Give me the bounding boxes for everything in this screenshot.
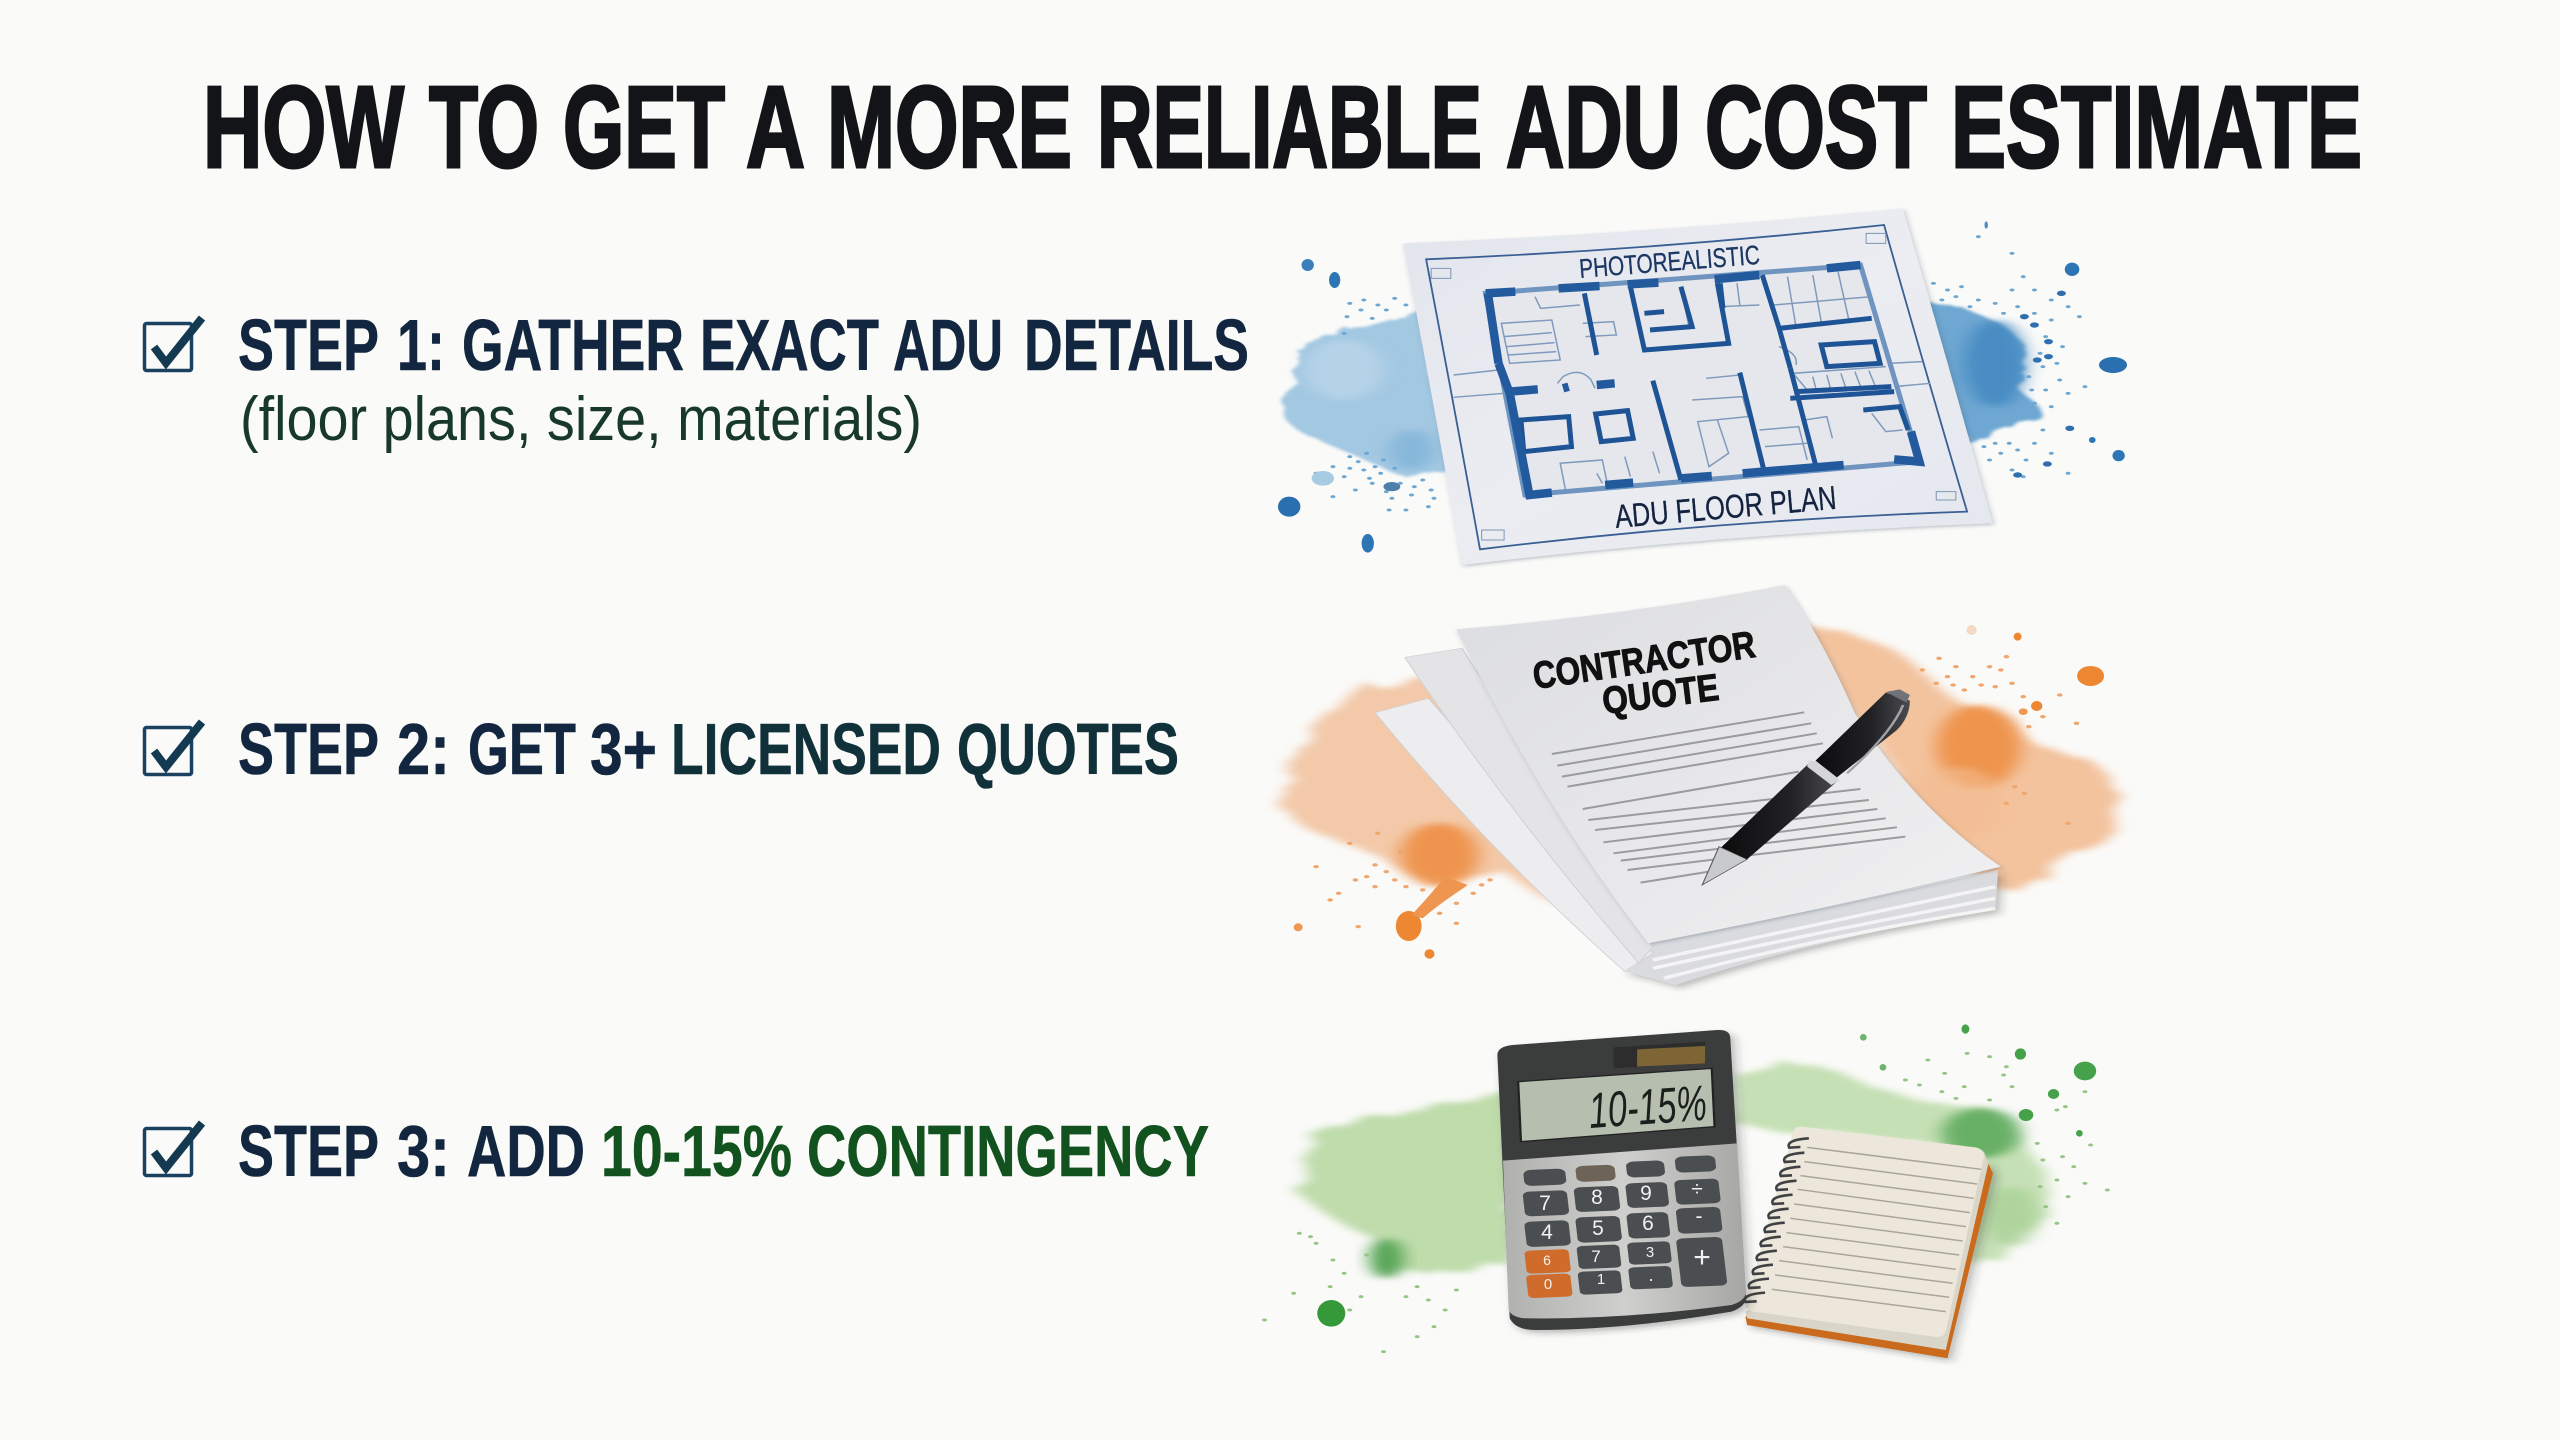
title: GET: [563, 62, 725, 192]
title: RELIABLE: [1097, 62, 1482, 192]
heading: step 3: ADD: [467, 1112, 585, 1192]
heading: step 1: [238, 306, 1249, 386]
calculator key labels: [1539, 1178, 1711, 1293]
heading: step 3: CONTINGENCY: [807, 1112, 1209, 1192]
heading: step 1: GATHER: [462, 306, 684, 386]
heading: step 1: DETAILS: [1024, 306, 1249, 386]
calculator key labels: +: [1693, 1241, 1711, 1274]
step 2: [144, 710, 1179, 790]
icon: checkbox step 3: [144, 1123, 202, 1176]
calculator buttons: [1522, 1155, 1727, 1298]
label: contractor quote: QUOTE: [1600, 667, 1721, 723]
calculator key labels: 6: [1543, 1252, 1551, 1268]
calculator display reading: 10-15%: [1587, 1075, 1708, 1139]
watercolor: blue splash: [1278, 221, 2127, 553]
heading: step 3: STEP: [238, 1112, 379, 1192]
calculator key labels: 4: [1541, 1221, 1553, 1244]
title: ADU: [1506, 62, 1681, 192]
blueprint sheet: [1403, 208, 1992, 565]
illustration: blueprint floor plan: [1278, 208, 2127, 565]
title: HOW: [203, 62, 404, 192]
notepad: [1745, 1127, 1993, 1358]
label: ADU FLOOR PLAN: ADU FLOOR PLAN: [1613, 479, 1838, 535]
label: contractor quote: CONTRACTOR: [1530, 624, 1758, 698]
document stack edge: [1625, 870, 1998, 985]
title: ESTIMATE: [1951, 62, 2362, 192]
heading: step 2: [238, 710, 1179, 790]
heading: step 3: [238, 1112, 1209, 1192]
title: A: [746, 62, 805, 192]
sheet border and floor plan drawing: [1426, 225, 1967, 549]
label: contractor quote: [1530, 624, 1758, 723]
icon: checkbox step 1: [144, 318, 202, 370]
title: COST: [1705, 62, 1927, 192]
step 3: [144, 1112, 1209, 1192]
title: TO: [429, 62, 539, 192]
calculator: [1497, 1030, 1746, 1330]
calculator key labels: 8: [1591, 1186, 1603, 1209]
calculator key labels: 3: [1646, 1244, 1654, 1261]
illustration: calculator and notepad: [1264, 1024, 2107, 1358]
heading: step 2: 2:: [397, 710, 450, 790]
calculator key labels: 1: [1597, 1271, 1605, 1288]
illustration: contractor quote with pen: [1285, 585, 2117, 985]
back sheets: [1375, 698, 1653, 972]
heading: step 3: 10-15%: [601, 1112, 792, 1192]
calculator key labels: ÷: [1691, 1178, 1703, 1201]
icon: checkbox step 2: [144, 722, 202, 774]
top sheet: [1456, 585, 2001, 943]
step 1: [144, 306, 1249, 454]
title: [203, 62, 2362, 192]
watercolor: orange splash: [1285, 625, 2117, 959]
calculator key labels: 5: [1592, 1217, 1604, 1240]
heading: step 2: STEP: [238, 710, 379, 790]
calculator key labels: 9: [1640, 1182, 1652, 1205]
title: MORE: [827, 62, 1072, 192]
calculator key labels: 0: [1544, 1276, 1552, 1293]
calculator key labels: 7: [1591, 1247, 1601, 1266]
heading: step 2: GET: [468, 710, 576, 790]
label: PHOTOREALISTIC: PHOTOREALISTIC: [1578, 240, 1761, 284]
heading: step 2: QUOTES: [957, 710, 1179, 790]
heading: step 1: EXACT: [700, 306, 879, 386]
calculator key labels: 7: [1539, 1192, 1551, 1215]
heading: step 3: 3:: [397, 1112, 450, 1192]
heading: step 2: 3+: [590, 710, 657, 790]
calculator key labels: .: [1648, 1265, 1654, 1285]
heading: step 1: ADU: [893, 306, 1003, 386]
text: step 1 details: (floor plans, size, materials): [240, 385, 922, 454]
heading: step 2: LICENSED: [671, 710, 941, 790]
heading: step 1: STEP: [238, 306, 379, 386]
calculator key labels: 6: [1642, 1212, 1654, 1235]
document lines: [1552, 712, 1905, 883]
calculator key labels: -: [1696, 1205, 1702, 1228]
heading: step 1: 1:: [397, 306, 445, 386]
icon: pen: [1702, 689, 1910, 885]
watercolor: green splash: [1264, 1024, 2107, 1352]
